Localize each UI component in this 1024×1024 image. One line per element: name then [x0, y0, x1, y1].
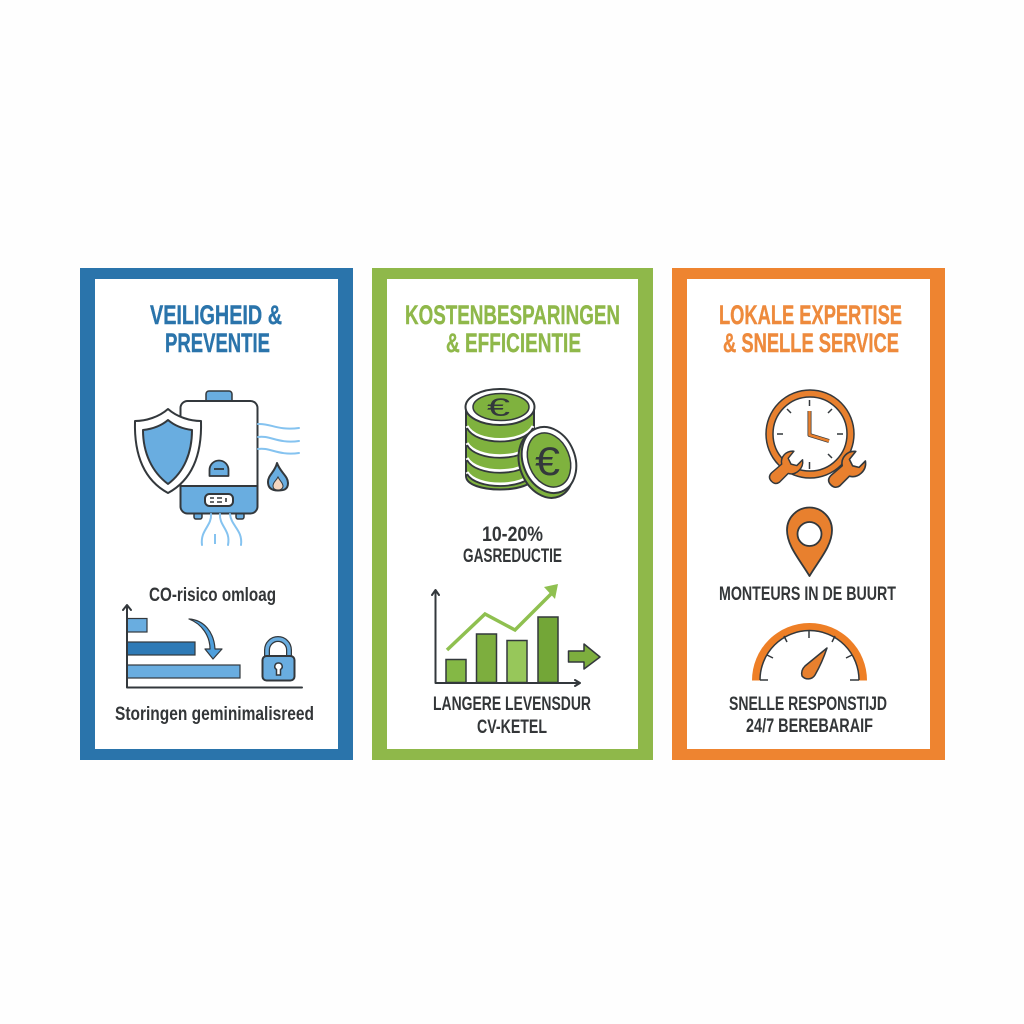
- icon: euro coin stack: [466, 389, 586, 506]
- label: snelle responstijd 24/7 bereikbaar: SNELLE RESPONSTIJD: [729, 694, 887, 715]
- heading: veiligheid en preventie: [150, 300, 282, 358]
- heading: lokale expertise en snelle service: & SNELLE SERVICE: [723, 328, 899, 358]
- label: snelle responstijd 24/7 bereikbaar: 24/7 BEREBARAIF: [746, 716, 873, 737]
- icon: speedometer gauge: [752, 623, 867, 680]
- panel: kostenbesparingen en efficientie: [372, 268, 653, 760]
- label: monteurs in de buurt: MONTEURS IN DE BUURT: [719, 584, 896, 605]
- heading: lokale expertise en snelle service: LOKALE EXPERTISE: [719, 300, 902, 330]
- heading: kostenbesparingen en efficientie: KOSTENBESPARINGEN: [405, 300, 620, 330]
- heading: kostenbesparingen en efficientie: & EFFICIENTIE: [446, 328, 581, 358]
- heading: lokale expertise en snelle service: [719, 300, 902, 358]
- label: gasreductie: GASREDUCTIE: [463, 546, 562, 567]
- euro sign on front coin: €: [535, 440, 560, 484]
- stat: 10-20%: 10-20%: [482, 523, 543, 546]
- panel: veiligheid en preventie: [80, 268, 353, 760]
- icon: padlock: [262, 639, 294, 680]
- label: snelle responstijd 24/7 bereikbaar: [729, 694, 887, 737]
- label: langere levensduur cv-ketel: LANGERE LEVENSDUR: [433, 694, 591, 715]
- euro sign on stacked coin: €: [487, 394, 510, 422]
- chart: horizontal bars with arrow: [123, 605, 302, 688]
- label: CO-risico omloag: CO-risico omloag: [149, 585, 276, 606]
- icon: location pin: [787, 508, 832, 576]
- chart: rising bars with arrows: [432, 584, 600, 686]
- heading: kostenbesparingen en efficientie: [405, 300, 620, 358]
- label: storingen geminimaliseerd: Storingen geminimalisreed: [115, 704, 314, 725]
- label: langere levensduur cv-ketel: [433, 694, 591, 738]
- label: langere levensduur cv-ketel: CV-KETEL: [477, 717, 547, 738]
- heading: veiligheid en preventie: VEILIGHEID &: [150, 300, 282, 330]
- icon: boiler with shield: [135, 391, 299, 545]
- panel: lokale expertise en snelle service: [672, 268, 945, 760]
- heading: veiligheid en preventie: PREVENTIE: [165, 328, 270, 358]
- arrow: right: [568, 644, 600, 669]
- icon: clock with wrenches: [766, 390, 866, 487]
